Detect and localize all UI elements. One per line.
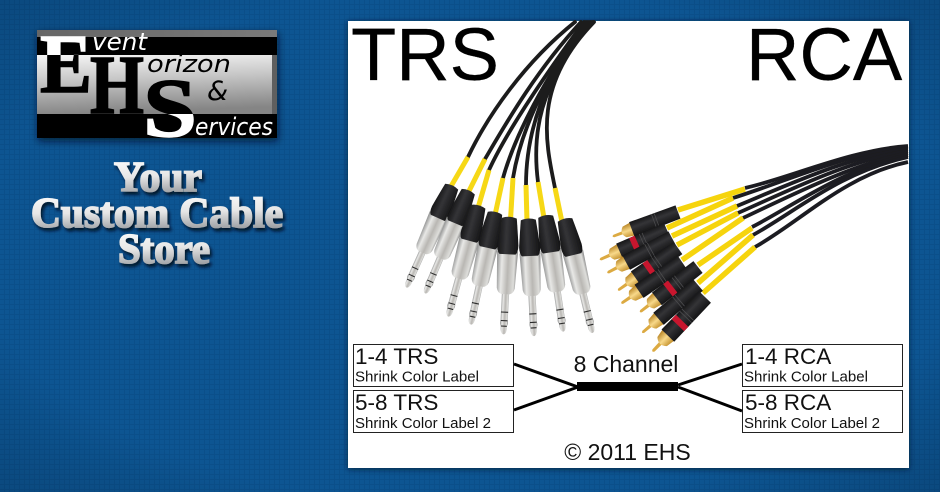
tagline: Your Custom Cable Store — [31, 155, 283, 273]
label box: 1-4 RCA — [742, 344, 902, 386]
logo initials white on black bands: S — [143, 62, 197, 155]
tagline: Your Custom Cable Store: Store — [118, 227, 210, 273]
label box: 5-8 RCA: Shrink Color Label 2 — [744, 415, 880, 432]
label box: 5-8 RCA: 5-8 RCA — [745, 390, 831, 415]
tagline: Your Custom Cable Store: Your — [114, 155, 202, 201]
TRS plugs — [397, 181, 603, 337]
logo initials white on black bands — [40, 36, 194, 138]
label box: 1-4 RCA: Shrink Color Label — [744, 368, 868, 386]
logo script words — [92, 28, 273, 141]
logo: Event Horizon & Services — [37, 18, 277, 155]
black RCA cables — [733, 146, 908, 247]
copyright: © 2011 EHS — [564, 439, 691, 465]
tagline: Your Custom Cable Store: Custom Cable — [31, 191, 283, 237]
diagram: cable wiring — [354, 344, 902, 465]
logo initials white on black bands: E — [40, 18, 92, 111]
logo script words: & — [207, 76, 228, 107]
label box: 5-8 TRS: Shrink Color Label 2 — [355, 415, 491, 432]
heading: TRS: TRS — [351, 13, 499, 96]
yellow RCA sleeves — [667, 189, 755, 293]
label box: 5-8 TRS — [354, 390, 514, 432]
yellow TRS sleeves — [450, 157, 562, 222]
label: 8 Channel: 8 Channel — [574, 351, 678, 377]
logo initials black on band: H — [90, 39, 144, 132]
label box: 5-8 RCA — [742, 390, 902, 432]
label box: 1-4 RCA: 1-4 RCA — [745, 344, 831, 369]
cable schematic: trunk and branches — [514, 364, 742, 411]
logo initials black on band — [40, 55, 193, 114]
label box: 5-8 TRS: 5-8 TRS — [355, 390, 438, 415]
label box: 1-4 TRS — [354, 344, 514, 386]
label box: 1-4 TRS: Shrink Color Label — [355, 368, 479, 386]
black TRS cables — [468, 22, 594, 188]
RCA plugs — [597, 205, 711, 358]
panel: white product card — [348, 21, 909, 468]
logo initials black on band: E — [40, 18, 92, 111]
logo script words: ervices — [195, 113, 273, 141]
logo initials black on band: S — [143, 62, 197, 155]
logo script words: vent — [92, 28, 149, 56]
logo script words: orizon — [147, 50, 231, 78]
photo: TRS cable fan — [397, 22, 603, 337]
heading: RCA: RCA — [746, 13, 903, 96]
label box: 1-4 TRS: 1-4 TRS — [355, 344, 438, 369]
photo: RCA cable fan — [597, 146, 908, 358]
